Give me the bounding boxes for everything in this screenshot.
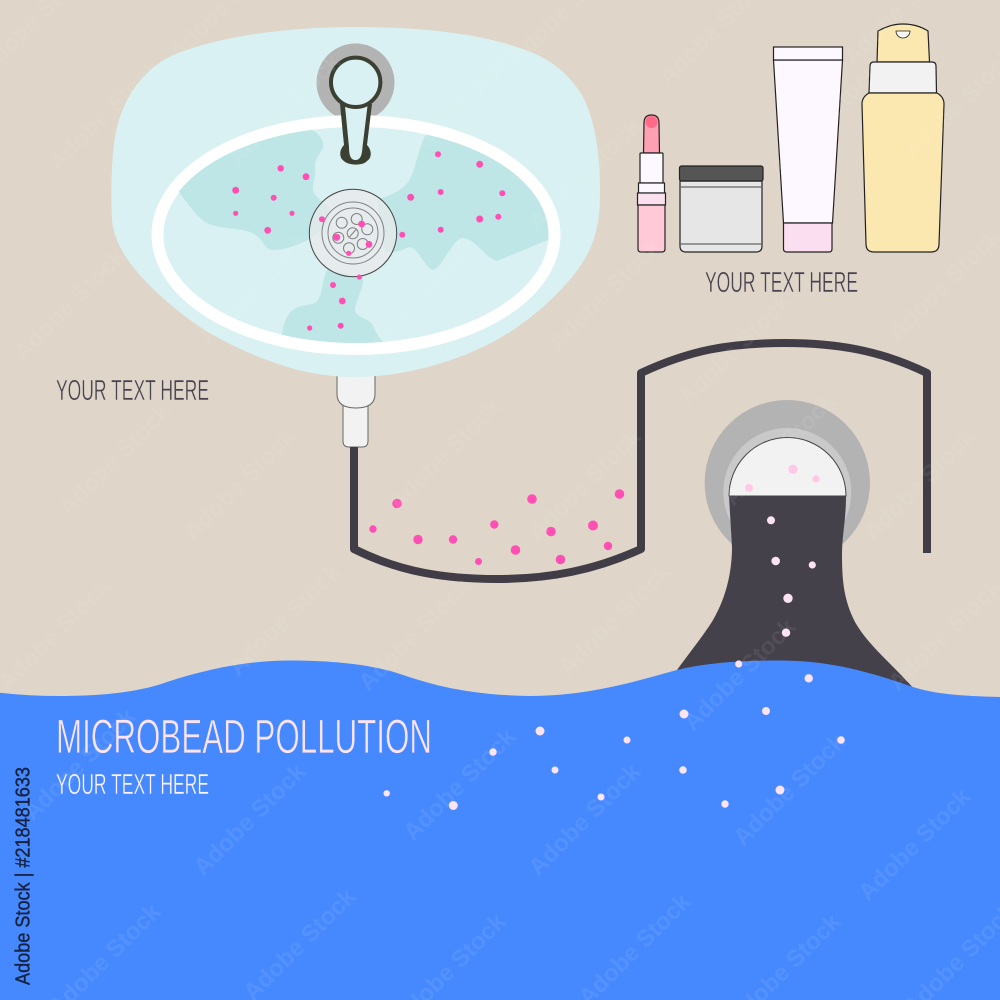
infographic canvas: Adobe Stock (728, 728, 852, 851)
infographic canvas: Adobe Stock (853, 783, 977, 906)
outflow outer ring (705, 400, 870, 565)
drain (309, 189, 397, 277)
subtitle: YOUR TEXT HERE (56, 769, 209, 801)
infographic canvas: Adobe Stock (673, 288, 797, 411)
basin rim (158, 121, 554, 349)
infographic canvas: Adobe Stock (43, 53, 167, 176)
infographic canvas: Adobe Stock (403, 38, 527, 161)
sink outer bowl (111, 27, 600, 377)
infographic canvas: Adobe Stock (223, 48, 347, 171)
infographic canvas: Adobe Stock (18, 703, 142, 826)
lipstick (638, 115, 666, 252)
infographic canvas: Adobe Stock (178, 423, 302, 546)
title: MICROBEAD POLLUTION (56, 711, 432, 764)
infographic canvas: Adobe Stock (553, 558, 677, 681)
infographic canvas: Adobe Stock (678, 613, 802, 736)
sink (111, 27, 600, 377)
waste water pipe (354, 343, 927, 579)
infographic canvas: Adobe Stock (353, 243, 477, 366)
tap handle (331, 58, 380, 165)
infographic canvas: Adobe Stock (523, 758, 647, 881)
infographic canvas: Adobe Stock (353, 573, 477, 696)
infographic canvas: Adobe Stock (8, 243, 132, 366)
infographic canvas: Adobe Stock (543, 233, 667, 356)
microbeads in sink (232, 151, 505, 331)
outflow pipe (666, 400, 915, 690)
cream tube (774, 47, 842, 252)
stock id label: Adobe Stock | #218481633 (12, 767, 34, 985)
infographic canvas: Adobe Stock (523, 423, 647, 546)
infographic canvas: Adobe Stock (398, 723, 522, 846)
discharge stream (666, 496, 915, 690)
infographic canvas: Adobe Stock (523, 113, 647, 236)
water patches (170, 128, 560, 350)
sink drain pipe fitting (337, 372, 375, 447)
infographic canvas: Adobe Stock (193, 228, 317, 351)
outflow opening (729, 438, 846, 496)
beads inside opening (745, 465, 820, 492)
caption: sink: YOUR TEXT HERE (56, 375, 209, 407)
outflow inner ring (723, 428, 851, 556)
caption: cosmetics: YOUR TEXT HERE (705, 267, 858, 299)
sea (0, 660, 1000, 1000)
infographic canvas: Adobe Stock (718, 388, 842, 511)
infographic canvas: Adobe Stock (223, 558, 347, 681)
infographic canvas: Adobe Stock (53, 398, 177, 521)
infographic canvas: Adobe Stock (763, 58, 887, 181)
infographic canvas: Adobe Stock (188, 758, 312, 881)
tap base plate (316, 44, 394, 122)
infographic canvas: Adobe Stock (383, 393, 507, 516)
pump bottle (862, 24, 944, 252)
microbeads in pipe (369, 489, 624, 565)
cosmetics products (638, 24, 944, 252)
microbeads in stream and sea (384, 516, 845, 810)
infographic canvas: Adobe Stock (858, 423, 982, 546)
cream jar (680, 166, 763, 252)
